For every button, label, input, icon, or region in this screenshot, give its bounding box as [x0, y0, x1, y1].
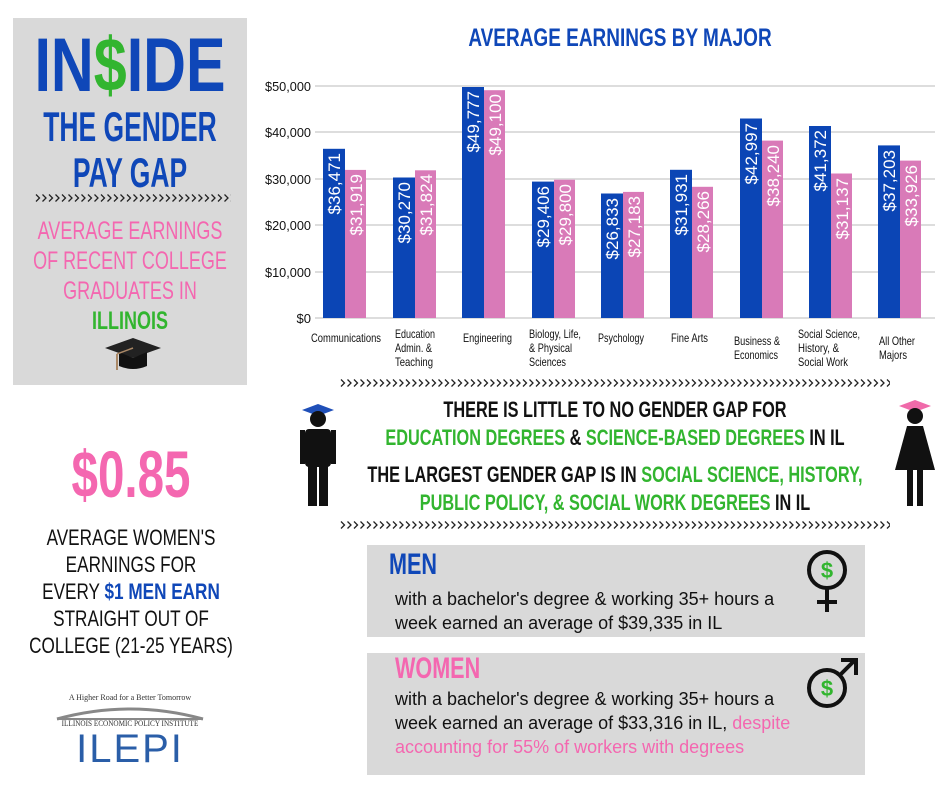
- text: stat description: COLLEGE (21-25 YEARS): [29, 633, 233, 658]
- bar chart: $31,919: [347, 174, 366, 235]
- subtitle: [43, 103, 217, 196]
- tagline: OF RECENT COLLEGE: [33, 247, 227, 275]
- bar chart: $31,824: [417, 174, 436, 235]
- chart title: AVERAGE EARNINGS BY MAJOR: [468, 24, 772, 52]
- bar chart: $30,270: [395, 182, 414, 243]
- text: key findings: [367, 397, 863, 515]
- panel: men: week earned an average of $39,335 in IL: [395, 613, 722, 633]
- bar chart: Majors: [879, 348, 907, 362]
- panel: women: WOMEN: [395, 652, 480, 685]
- panel: men: with a bachelor's degree & working 35+ hours a: [395, 589, 774, 609]
- bar chart: $20,000: [265, 218, 311, 233]
- bar chart: Sciences: [529, 355, 566, 369]
- bar chart: $42,997: [742, 123, 761, 184]
- subtitle: THE GENDER: [43, 103, 217, 150]
- bar chart: $41,372: [811, 130, 830, 191]
- bar chart: $36,471: [325, 153, 344, 214]
- text: key findings: THE LARGEST GENDER GAP IS IN SOCIAL SCIENCE, HISTORY,: [367, 462, 863, 487]
- icon: venus with dollar: [807, 550, 847, 612]
- logo: ILEPI: ILLINOIS ECONOMIC POLICY INSTITUTE: [62, 719, 198, 728]
- bar chart: History, &: [798, 341, 839, 355]
- panel: men: [367, 545, 865, 637]
- logo: ILEPI: A Higher Road for a Better Tomorrow: [69, 693, 191, 702]
- bar chart: All Other: [879, 334, 915, 348]
- logo: ILEPI: [56, 693, 204, 771]
- bar chart: $29,800: [556, 184, 575, 245]
- bar chart: $28,266: [694, 191, 713, 252]
- title: IN$IDE: [34, 23, 226, 108]
- stat: $0.85: $0.85: [72, 437, 190, 511]
- bar chart: $10,000: [265, 265, 311, 280]
- icon: woman graduate: [895, 400, 935, 506]
- bar chart: $49,100: [486, 94, 505, 155]
- bar chart: $29,406: [534, 186, 553, 247]
- bar chart: $38,240: [764, 145, 783, 206]
- bar chart: Teaching: [395, 355, 433, 369]
- bar chart: Communications: [311, 331, 381, 345]
- panel: women: accounting for 55% of workers with degrees: [395, 737, 744, 757]
- icon: mars with dollar: $: [821, 676, 833, 701]
- bar chart: Education: [395, 327, 435, 341]
- tagline: GRADUATES IN: [63, 277, 197, 305]
- bar chart: Social Science,: [798, 327, 860, 341]
- icon: venus with dollar: $: [821, 558, 833, 583]
- text: stat description: EVERY $1 MEN EARN: [42, 579, 220, 604]
- bar chart: Business &: [734, 334, 780, 348]
- bar chart: Social Work: [798, 355, 849, 369]
- bar chart: Economics: [734, 348, 778, 362]
- bar chart: Engineering: [463, 331, 512, 345]
- bar chart: $33,926: [902, 165, 921, 226]
- icon: man graduate: [300, 404, 336, 506]
- bar chart: $31,931: [672, 174, 691, 235]
- bar chart: $27,183: [625, 196, 644, 257]
- bar chart: & Physical: [529, 341, 572, 355]
- logo: ILEPI: ILEPI: [76, 727, 184, 771]
- icon: mars with dollar: [807, 658, 858, 708]
- bar chart: $31,137: [833, 178, 852, 239]
- bar chart: Psychology: [598, 331, 644, 345]
- text: stat description: [29, 525, 233, 658]
- panel: women: [367, 653, 865, 775]
- bar chart: $49,777: [464, 91, 483, 152]
- bar chart: $40,000: [265, 125, 311, 140]
- panel: men: MEN: [389, 548, 437, 581]
- text: key findings: EDUCATION DEGREES & SCIENCE-BASED DEGREES IN IL: [385, 425, 845, 450]
- bar chart: $50,000: [265, 79, 311, 94]
- tagline: [33, 217, 227, 335]
- panel: title box: [13, 18, 247, 385]
- tagline: AVERAGE EARNINGS: [38, 217, 222, 245]
- tagline: ILLINOIS: [92, 307, 168, 335]
- icon: graduation cap: [105, 338, 161, 370]
- bar chart: $0: [297, 311, 311, 326]
- panel: women: week earned an average of $33,316 in IL, despite: [395, 713, 790, 733]
- bar chart: $30,000: [265, 172, 311, 187]
- text: key findings: THERE IS LITTLE TO NO GENDER GAP FOR: [443, 397, 787, 422]
- bar chart: Fine Arts: [671, 331, 708, 345]
- text: stat description: EARNINGS FOR: [66, 552, 196, 577]
- subtitle: PAY GAP: [73, 149, 187, 196]
- text: stat description: AVERAGE WOMEN'S: [47, 525, 215, 550]
- bar chart: $26,833: [603, 198, 622, 259]
- panel: women: with a bachelor's degree & working 35+ hours a: [395, 689, 774, 709]
- bar chart: $37,203: [880, 150, 899, 211]
- text: key findings: PUBLIC POLICY, & SOCIAL WORK DEGREES IN IL: [420, 490, 810, 515]
- bar chart: Admin. &: [395, 341, 432, 355]
- text: stat description: STRAIGHT OUT OF: [53, 606, 209, 631]
- bar chart: Biology, Life,: [529, 327, 581, 341]
- bar chart: [265, 79, 935, 369]
